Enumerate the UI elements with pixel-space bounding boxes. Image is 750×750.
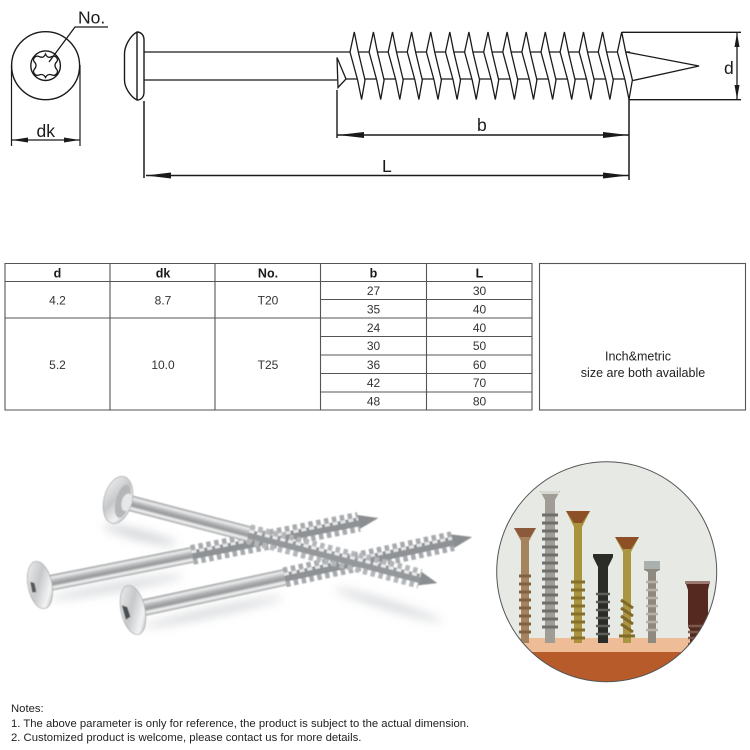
table rows: 4.2	[49, 294, 66, 308]
screw shadows	[49, 521, 443, 631]
circle outline	[497, 462, 717, 682]
screw 2 silver	[540, 491, 560, 643]
table rows: 5.2	[49, 358, 66, 372]
screw 1 tan	[514, 528, 536, 643]
No. label with leader	[49, 8, 108, 62]
photo: assorted screws in wood, circular	[496, 461, 718, 682]
table rows: 27	[367, 284, 380, 298]
table rows: 24	[367, 321, 380, 335]
L dimension: L	[382, 156, 392, 176]
table rows: 60	[473, 358, 486, 372]
screw 5 gold	[615, 537, 639, 643]
screw side view	[124, 32, 699, 100]
size availability box	[540, 264, 746, 410]
screw: back left	[24, 494, 383, 611]
b dimension	[337, 90, 629, 138]
size availability box: size are both available	[581, 366, 705, 380]
table rows: 40	[473, 302, 486, 316]
notes: 1. The above parameter is only for reference, the product is subject to the actual dimension.	[11, 718, 469, 730]
technical drawing	[12, 8, 741, 180]
table rows: 36	[367, 358, 380, 372]
wood block	[520, 638, 690, 652]
screw: top	[98, 473, 443, 606]
table rows	[49, 284, 486, 408]
notes: Notes:	[11, 703, 44, 715]
L dimension	[144, 99, 629, 180]
table header: No.	[258, 266, 278, 280]
notes	[11, 703, 469, 744]
head view circle with torx recess	[12, 32, 80, 100]
photo: three silver screws	[24, 473, 477, 637]
b dimension: b	[477, 115, 487, 135]
screw 4 black	[593, 554, 613, 643]
screw: front	[116, 513, 477, 637]
table rows: 30	[367, 339, 380, 353]
dk dimension: dk	[36, 121, 55, 141]
screw 7 dark brown	[685, 581, 710, 645]
table rows: 8.7	[155, 294, 172, 308]
table header: dk	[156, 266, 170, 280]
notes: 2. Customized product is welcome, please contact us for more details.	[11, 732, 361, 744]
table rows: 10.0	[151, 358, 175, 372]
table rows: 50	[473, 339, 486, 353]
dimension table	[5, 264, 532, 410]
table rows: 30	[473, 284, 486, 298]
d dimension: d	[724, 58, 734, 78]
table rows: 35	[367, 302, 380, 316]
table header: b	[370, 266, 378, 280]
table rows: 40	[473, 321, 486, 335]
table rows: 42	[367, 376, 380, 390]
No. label with leader: No.	[78, 8, 105, 28]
table header: L	[476, 266, 484, 280]
table header	[54, 266, 484, 280]
table rows: 70	[473, 376, 486, 390]
screw 3 gold	[566, 511, 590, 643]
wall background	[497, 462, 716, 638]
table header: d	[54, 266, 61, 280]
table grid	[5, 264, 532, 410]
size availability box: Inch&metric	[605, 350, 671, 364]
dk dimension	[12, 65, 80, 146]
screw 6 silver	[644, 561, 660, 643]
table rows: 80	[473, 394, 486, 408]
table rows: 48	[367, 394, 380, 408]
table rows: T25	[258, 358, 279, 372]
table rows: T20	[258, 294, 279, 308]
d dimension	[622, 32, 741, 100]
